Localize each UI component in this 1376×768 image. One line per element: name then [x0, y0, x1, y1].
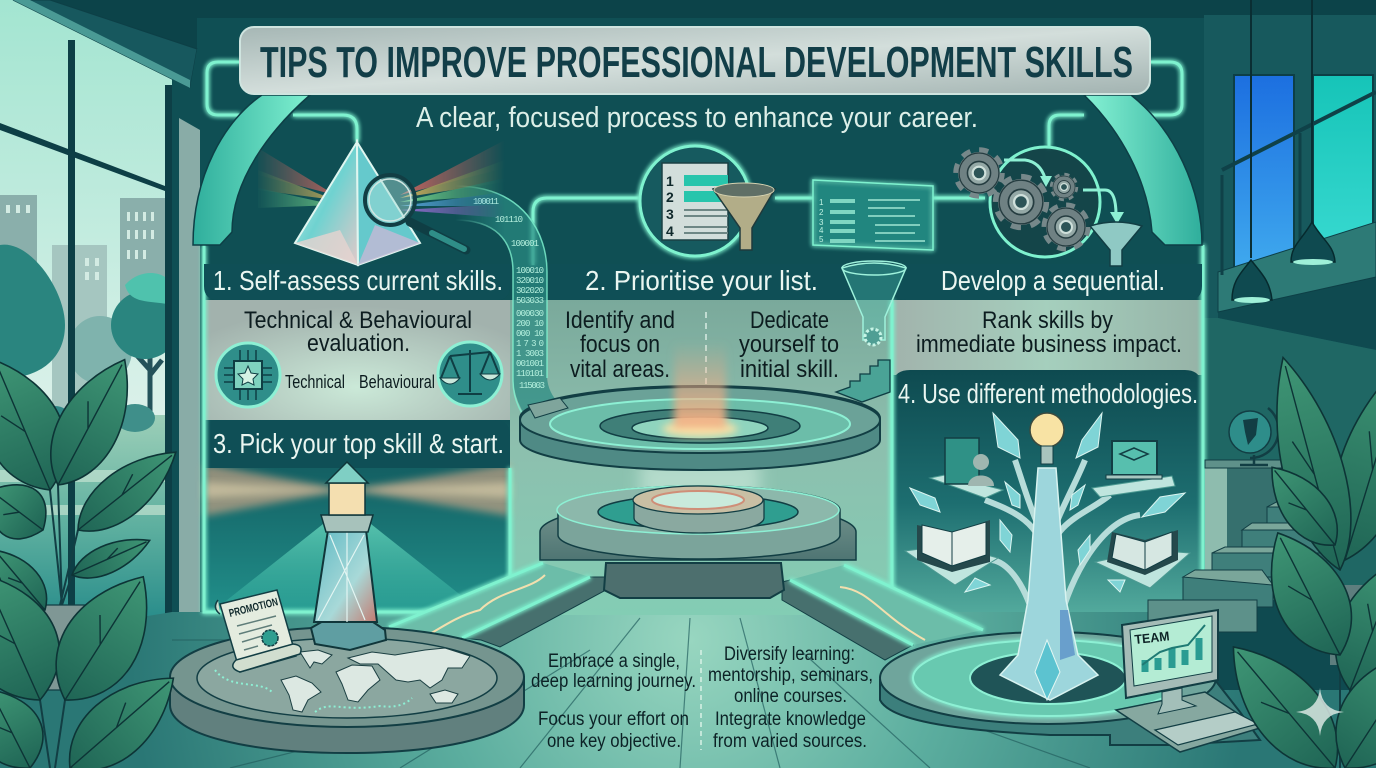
park ground	[0, 415, 172, 640]
text: identify and focus	[565, 307, 675, 383]
binary data stream: 302020	[516, 286, 544, 296]
binary data stream: 101110	[495, 215, 523, 225]
light column lower	[640, 460, 760, 520]
promotion scroll: PROMOTION	[228, 596, 279, 620]
holographic list screen: 5	[819, 235, 824, 244]
light beam down	[212, 505, 482, 612]
label: technical: Technical	[285, 372, 345, 392]
watermark sparkle	[1296, 688, 1344, 736]
blue door window	[1234, 75, 1294, 270]
divider	[700, 650, 702, 750]
binary data stream: 503033	[516, 296, 544, 306]
neon frame lines	[204, 62, 1203, 620]
text: dedicate yourself: yourself to	[739, 331, 839, 358]
binary data stream: 000 10	[516, 329, 544, 339]
binary data stream: 200 10	[516, 319, 544, 329]
park trees	[0, 245, 179, 432]
floor	[0, 612, 1376, 768]
binary data stream: 100001	[511, 239, 539, 249]
header: step 1: 1. Self-assess current skills.	[213, 265, 503, 296]
binary data stream: 000030	[516, 309, 544, 319]
binary data stream: 115003	[519, 381, 545, 391]
ceiling	[50, 0, 1376, 49]
panel: step 3 lighthouse backdrop	[204, 420, 510, 612]
text: technical and behavioural evaluation: Technical & Behavioural	[244, 307, 472, 334]
icon: balance scale	[438, 342, 502, 406]
text: diversify learning: Integrate knowledge	[715, 709, 866, 730]
binary data stream: 100011	[473, 197, 499, 207]
text: diversify learning: from varied sources.	[713, 731, 867, 752]
lower tiered platform	[540, 486, 856, 598]
icon: ranked list document: 4	[666, 223, 674, 239]
icon: ranked list document: 1	[666, 173, 674, 189]
window with city park view	[0, 0, 179, 646]
text: identify and focus: focus on	[580, 331, 660, 358]
text: rank skills	[916, 307, 1182, 358]
icon: small funnel	[1090, 222, 1142, 266]
text: embrace a single journey: Focus your effort on	[538, 709, 689, 730]
hanging lamps	[1232, 0, 1335, 303]
panel: column 1 frame	[204, 300, 510, 425]
holographic list screen: 1	[819, 198, 824, 207]
crystal leaves	[910, 413, 1185, 592]
text: identify and focus: Identify and	[565, 307, 675, 334]
promotion scroll	[215, 590, 301, 672]
left open book	[905, 520, 998, 585]
subtitle: A clear, focused process to enhance your career.	[416, 102, 978, 134]
step 4 heading: 4. Use different methodologies.	[898, 378, 1198, 409]
icon: rainbow prism with magnifier	[258, 140, 505, 265]
window frame	[0, 40, 173, 646]
binary data stream: 100010	[516, 266, 544, 276]
text: embrace a single journey: one key objective.	[547, 731, 681, 752]
text: technical and behavioural evaluation: evaluation.	[307, 330, 410, 357]
binary data stream: 001001	[516, 359, 544, 369]
header: develop a sequential: Develop a sequential.	[941, 265, 1165, 296]
divider	[705, 312, 707, 385]
binary data stream: 110101	[516, 369, 544, 379]
text: identify and focus: vital areas.	[570, 356, 670, 383]
icon: ranked list document: 3	[666, 206, 674, 222]
globe	[1229, 408, 1279, 465]
icon: holographic funnel and gear	[842, 261, 906, 345]
icon: light bulb	[1030, 413, 1064, 464]
gears with circular frame	[958, 147, 1124, 257]
icon: ranked list document: 2	[666, 189, 674, 205]
panel: column 2 body	[510, 300, 892, 615]
stairs	[1148, 460, 1375, 690]
right plant	[1208, 349, 1376, 768]
holographic list screen: 3	[819, 218, 824, 227]
text: diversify learning: Diversify learning:	[724, 644, 855, 665]
pathway to map disc	[389, 563, 606, 647]
ceiling beam	[13, 0, 197, 88]
panel: step 4 backdrop	[892, 370, 1202, 612]
right wall	[1204, 15, 1376, 615]
text: rank skills: Rank skills by	[982, 307, 1113, 334]
step 3 header	[204, 420, 510, 468]
text: embrace a single journey: deep learning journey.	[531, 671, 696, 692]
balcony underside	[1218, 277, 1376, 350]
label: behavioural: Behavioural	[359, 372, 435, 392]
binary data stream	[455, 186, 552, 428]
warm beams	[204, 464, 510, 516]
text: dedicate yourself: initial skill.	[740, 356, 839, 383]
right open book	[1095, 530, 1190, 588]
arch: right	[1084, 95, 1202, 245]
header: step 2	[550, 264, 892, 300]
binary data stream: 320010	[516, 276, 544, 286]
holographic list screen: 4	[819, 226, 824, 235]
text: dedicate yourself	[739, 307, 839, 383]
pathway to tree disc	[782, 565, 983, 660]
panel: step 3 lighthouse backdrop: 3. Pick your top skill & start.	[213, 428, 504, 459]
upper floating disc	[520, 342, 880, 470]
lighthouse	[311, 462, 386, 650]
title banner	[240, 27, 1150, 94]
holographic list screen	[813, 180, 933, 250]
left plant	[0, 346, 193, 768]
tree disc	[880, 632, 1260, 745]
icon: ranked list document	[640, 146, 750, 256]
team monitor and desk	[1116, 610, 1260, 752]
text: diversify learning: mentorship, seminars,	[708, 665, 873, 686]
text: diversify learning	[708, 644, 873, 752]
text: embrace a single journey	[531, 651, 696, 752]
distant buildings	[0, 195, 165, 415]
text: technical and behavioural evaluation	[244, 307, 472, 357]
text: rank skills: immediate business impact.	[916, 331, 1182, 358]
holographic list screen: 2	[819, 208, 824, 217]
arch: left	[193, 95, 310, 245]
world map	[281, 648, 470, 712]
icon: small stairs	[836, 360, 890, 402]
left wall pale column	[179, 118, 200, 612]
team monitor and desk: TEAM	[1134, 628, 1170, 647]
text: embrace a single journey: Embrace a single,	[548, 651, 680, 672]
text: diversify learning: online courses.	[734, 686, 847, 707]
panel: column 3 body	[892, 300, 1202, 375]
ceiling beam highlight	[13, 0, 190, 88]
binary data stream: 1730	[516, 339, 544, 349]
icon: technical chip	[216, 343, 280, 407]
left wall strip	[172, 49, 204, 620]
top right shelf with laptop	[1092, 441, 1175, 497]
binary data stream: 1 3003	[516, 349, 544, 359]
knowledge tree	[905, 413, 1190, 700]
top left shelf with book and person	[930, 438, 1003, 498]
map disc	[170, 627, 524, 753]
header: step 2: 2. Prioritise your list.	[585, 265, 818, 296]
cyan door window	[1313, 75, 1373, 245]
icon: funnel	[713, 183, 775, 250]
text: dedicate yourself: Dedicate	[750, 307, 829, 334]
